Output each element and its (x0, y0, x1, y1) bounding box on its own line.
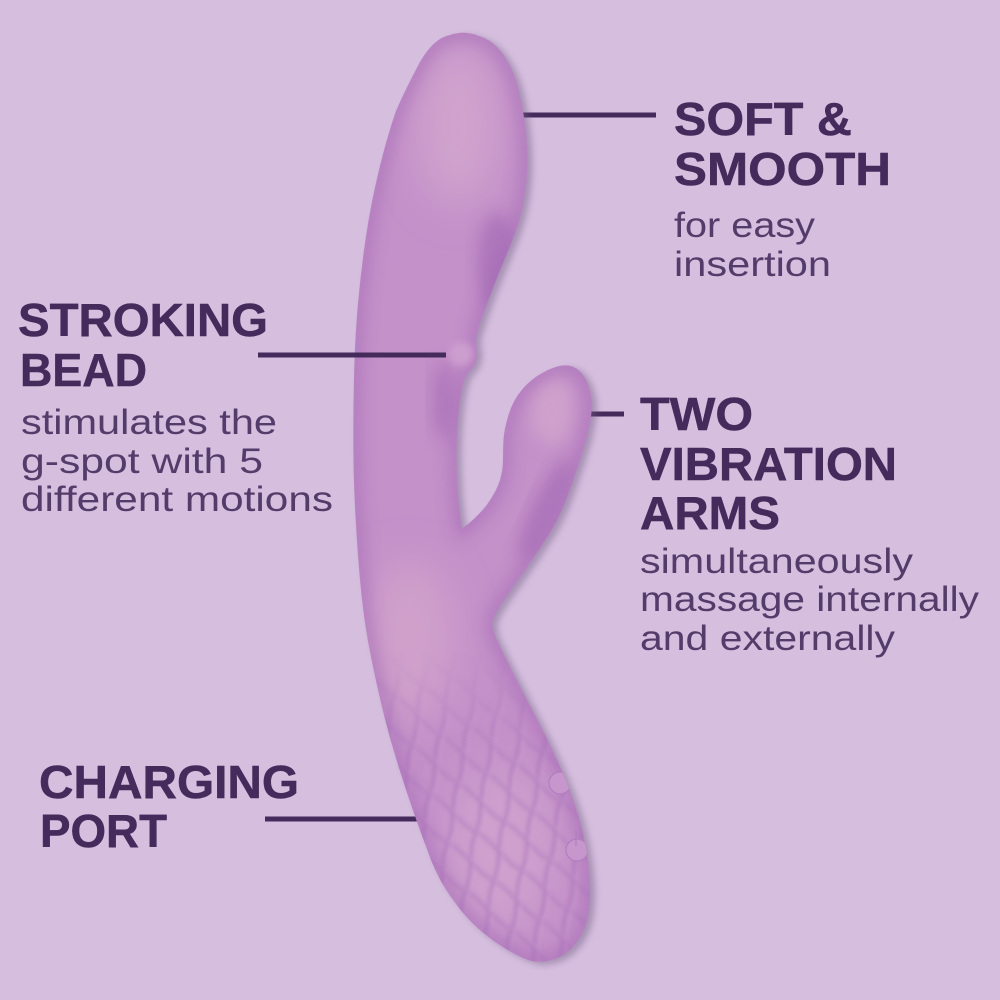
text: two vibration arms description: massage internally (640, 580, 980, 619)
heading: two vibration arms: VIBRATION (640, 438, 897, 490)
heading: charging port: PORT (40, 805, 167, 857)
text: for easy insertion (674, 206, 831, 284)
shading: below bead (432, 360, 454, 440)
heading: charging port (39, 756, 299, 857)
heading: two vibration arms: ARMS (640, 487, 780, 539)
text: two vibration arms description: and externally (640, 619, 896, 658)
heading: soft and smooth: SOFT & (674, 93, 852, 145)
leader line: soft and smooth (520, 112, 656, 118)
stroking bead (449, 342, 473, 366)
shading: arm underside (515, 460, 571, 557)
heading: two vibration arms (640, 388, 897, 539)
leader line: charging port (265, 816, 420, 822)
base colour (353, 32, 592, 962)
text: stroking bead description: different motions (21, 480, 333, 519)
highlights (418, 45, 498, 205)
leader line: stroking bead (258, 352, 446, 358)
text: two vibration arms description: simultaneously (640, 542, 914, 581)
text: two vibration arms description (640, 542, 980, 658)
text: stroking bead description (21, 403, 333, 519)
heading: stroking bead: BEAD (20, 344, 147, 396)
text: for easy insertion: insertion (674, 245, 831, 284)
button: power (566, 830, 588, 861)
handle diamond texture (406, 706, 581, 956)
leader line: two vibration arms (585, 412, 624, 416)
heading: soft and smooth: SMOOTH (674, 143, 891, 195)
heading: charging port: CHARGING (39, 756, 299, 808)
text: for easy insertion: for easy (674, 206, 816, 245)
heading: soft and smooth (674, 93, 891, 195)
edge shading (353, 33, 592, 962)
button: upper (549, 772, 571, 794)
text: stroking bead description: stimulates the (21, 403, 277, 442)
heading: two vibration arms: TWO (640, 388, 753, 440)
text: stroking bead description: g-spot with 5 (21, 442, 263, 481)
product shadow (358, 36, 597, 965)
shading: head underside (477, 212, 517, 312)
heading: stroking bead (18, 294, 268, 396)
heading: stroking bead: STROKING (18, 294, 268, 346)
product illustration (353, 32, 592, 962)
